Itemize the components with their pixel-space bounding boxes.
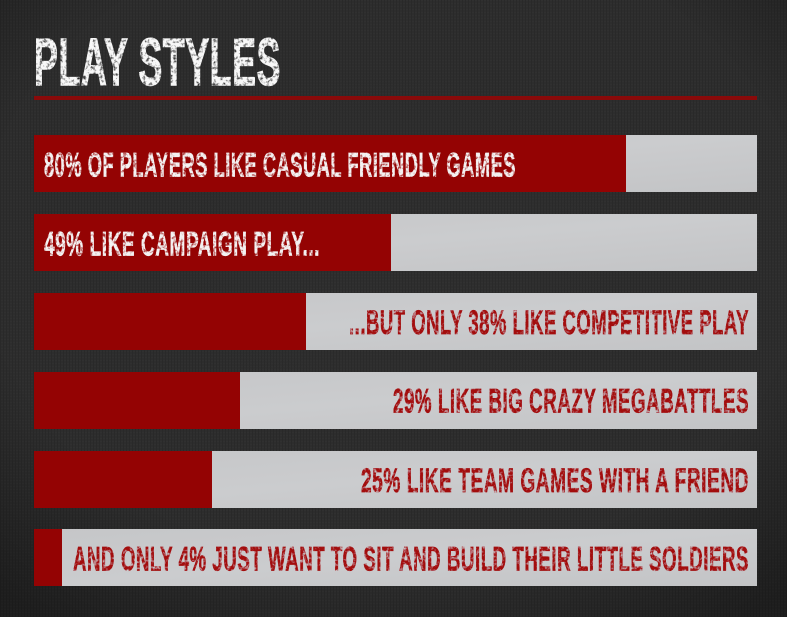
bar 4: 29% big crazy megabattles [34,372,757,429]
title: PLAY STYLES [34,25,281,100]
bar 6: 4% build their little soldiers [34,529,757,586]
bar 5: 25% team games with a friend [34,451,757,508]
bar 2: 49% campaign play [34,214,757,271]
bar 2: 49% campaign play: 49% LIKE CAMPAIGN PLAY... [44,226,320,264]
title underline [34,96,757,100]
bar 3: 38% competitive play [34,293,757,350]
bar 1: 80% casual friendly games [34,135,757,192]
